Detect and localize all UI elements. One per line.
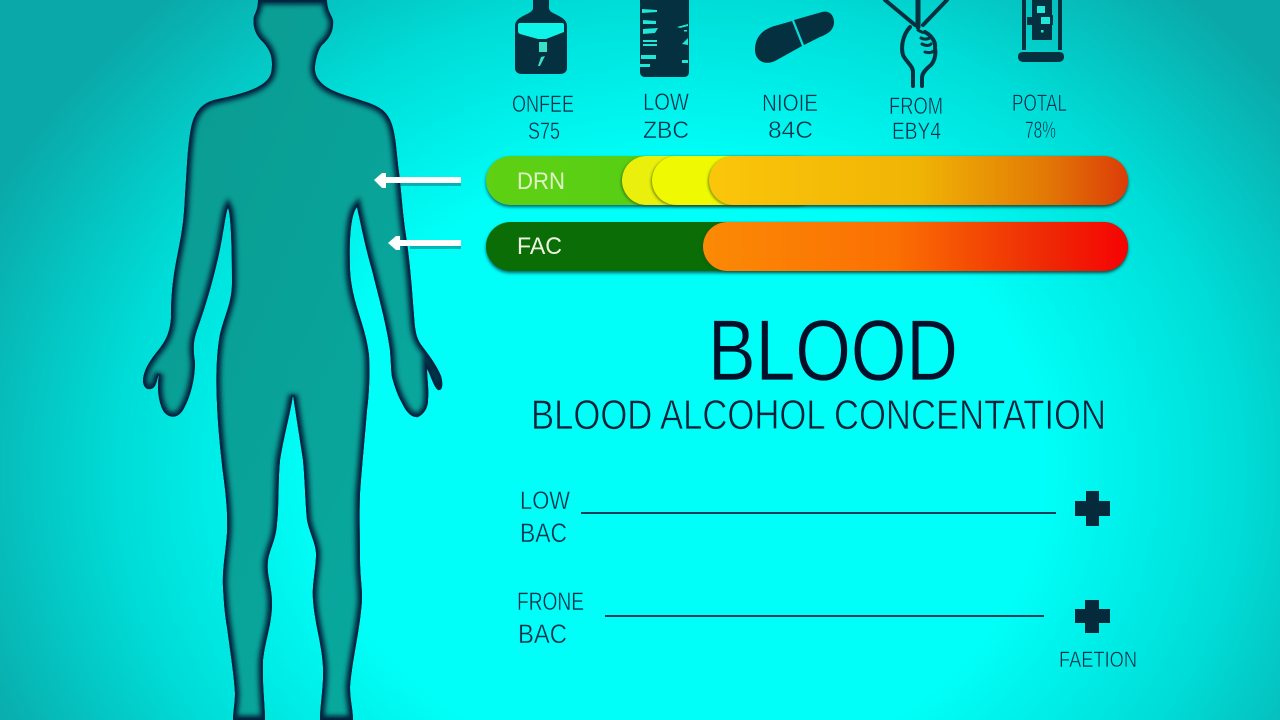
bar: FAC scale: [486, 222, 1128, 271]
arrow: lower pointer to body: [388, 236, 461, 250]
arrow: upper pointer to body: [374, 173, 461, 188]
value: low: ZBC: [643, 117, 689, 144]
label: total: POTAL: [1012, 90, 1067, 117]
legend row: low BAC: BAC: [520, 518, 567, 548]
label: low: LOW: [643, 89, 689, 116]
icon: capsule pill: [755, 12, 834, 63]
subtitle: BLOOD ALCOHOL CONCENTATION: [531, 391, 1106, 438]
value: from: EBY4: [892, 118, 941, 145]
value: total: 78%: [1025, 117, 1056, 144]
legend row: frone BAC: [517, 588, 1137, 672]
label: from: FROM: [889, 93, 943, 120]
icon: plus: [1075, 600, 1110, 633]
label: once: ONFEE: [512, 91, 574, 118]
human body silhouette: [143, 0, 442, 720]
value: more: 84C: [768, 117, 813, 144]
caption: FAETION: [1059, 647, 1137, 672]
label: more: NIOIE: [762, 90, 818, 117]
icon: framed device: [1018, 0, 1064, 62]
legend row: low BAC: LOW: [520, 487, 570, 515]
icon: striped bottle: [640, 0, 689, 77]
legend row: frone BAC: BAC: [518, 619, 567, 649]
icon: plus: [1075, 491, 1110, 526]
legend row: low BAC: [520, 487, 1110, 548]
level labels row: [512, 89, 1067, 145]
bar label: DRN: [517, 168, 565, 195]
bar label: FAC: [517, 233, 562, 260]
legend row: frone BAC: FRONE: [517, 588, 584, 616]
icon: bottle: [515, 0, 567, 74]
bar: DRN scale: [486, 156, 1128, 205]
value: once: S75: [528, 118, 560, 145]
title: BLOOD: [708, 303, 958, 399]
icon: hand gripping lines: [885, 0, 947, 86]
